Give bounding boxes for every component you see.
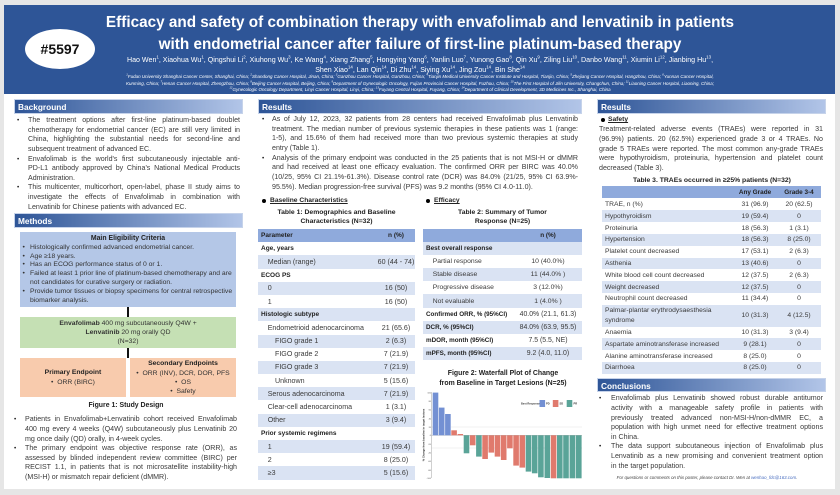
results paragraphs: As of July 12, 2023, 32 patients from 28 centers had received Envafolimab plus Lenvatinib — [272, 115, 578, 123]
table 3: adverse events: Hypothyroidism — [605, 212, 652, 220]
y axis ticks: -80 — [428, 470, 432, 472]
figure 2 title: Figure 2: Waterfall Plot of Change — [448, 370, 558, 377]
heading: Methods — [14, 213, 243, 228]
table 3: adverse events: 0 — [797, 260, 801, 267]
table 3: adverse events: 31 (96.9) — [741, 200, 769, 208]
table 3: adverse events: White blood cell count decreased — [605, 272, 704, 279]
table 1: demographics: 19 (59.4) — [382, 443, 410, 451]
eligibility list — [30, 244, 232, 304]
eligibility bullets: • — [22, 253, 25, 260]
table 1: demographics: Prior systemic regimens — [261, 430, 337, 437]
table 3: adverse events: Any Grade — [739, 188, 771, 196]
treatment box: Lenvatinib 20 mg orally QD — [86, 329, 170, 336]
table 1: demographics: 7 (21.9) — [384, 363, 408, 371]
bullet marks: • — [599, 443, 601, 450]
table 3: adverse events: 8 (25.0) — [787, 236, 811, 243]
background paragraphs: Envafolimab is the world's first subcutaneously injectable anti- — [28, 154, 240, 162]
table 3: adverse events: syndrome — [605, 317, 635, 324]
conclusions paragraphs: previously treated advanced non-MSI-H/non-dMMR EC, a — [611, 414, 823, 422]
table 2 title — [458, 209, 547, 225]
heading: Results (right column) — [597, 99, 826, 114]
conclusions paragraphs — [611, 394, 823, 470]
table 3: adverse events: 12 (37.5) — [741, 272, 769, 279]
bullet marks — [262, 116, 264, 162]
table 2: tumor response: n (%) — [540, 232, 556, 239]
table 3: adverse events: TRAE, n (%) — [605, 200, 643, 208]
bullet marks: • — [17, 184, 19, 191]
table 1: demographics: Median (range) — [268, 258, 316, 266]
results paragraphs: Analysis of the primary endpoint was conducted in the 25 patients that is not MSI-H or dMMR — [272, 154, 578, 162]
subheading: baseline characteristics: Baseline Characteristics — [270, 197, 348, 204]
table 3: adverse events: 10 (31.3) — [741, 329, 769, 336]
methods paragraphs: assessed by blinded independent review committee (BIRC) per — [25, 454, 237, 462]
table 2 title: Response (N=25) — [475, 218, 530, 225]
authors — [127, 55, 713, 74]
results paragraphs — [272, 115, 578, 191]
eligibility list: Failed at least 1 prior line of platinum-based chemotherapy and are — [30, 270, 232, 277]
table 2: tumor response: 1 (4.0% ) — [534, 298, 562, 305]
table 3: adverse events: Palmar-plantar erythrodysaesthesia — [605, 307, 712, 314]
table 3: adverse events: 8 (25.0) — [743, 364, 767, 371]
table 2: tumor response: Partial response — [433, 258, 482, 265]
table 1: demographics: 7 (21.9) — [384, 350, 408, 358]
background paragraphs: The treatment options after first-line platinum-based doublet — [28, 116, 240, 124]
y axis ticks: 20 — [429, 427, 432, 429]
legend: PR — [574, 402, 577, 406]
table 1: demographics: 0 — [268, 284, 272, 292]
heading: Results (middle column): Results — [262, 102, 292, 112]
results paragraphs: treatment. The median number of previous systemic therapies in these patients was 1 (range: — [272, 125, 578, 133]
bullet marks — [17, 117, 19, 191]
study design flow diagram — [20, 232, 236, 397]
eligibility list: Has an ECOG performance status of 0 or 1. — [30, 261, 162, 268]
results paragraphs: and had received at least one efficacy evaluation. The confirmed ORR per BIRC was 40.0% — [272, 163, 578, 171]
eligibility bullets: • — [22, 261, 25, 268]
eligibility list: not candidates for curative surgery or radiation. — [30, 279, 172, 286]
background paragraphs: China, highlighting the substantial needs for second-line and — [28, 135, 240, 143]
background paragraphs: Lenvatinib for Chinese patients with advanced EC. — [28, 203, 187, 211]
table 1: demographics: 1 — [268, 443, 272, 451]
treatment box — [20, 317, 236, 348]
table 3 title: Table 3. TRAEs occurred in ≥25% patients (N=32) — [633, 176, 791, 184]
caption: Figure 1: Figure 1: Study Design — [88, 402, 164, 409]
conclusions paragraphs: in the target population. — [611, 462, 685, 470]
table 1: demographics: 1 — [268, 298, 272, 306]
bullet marks — [14, 416, 16, 452]
table 2: tumor response: 7.5 (5.5, NE) — [528, 337, 568, 344]
table 3: adverse events: 11 (34.4) — [742, 295, 768, 302]
legend: SD — [560, 402, 563, 406]
bullet: efficacy — [426, 199, 430, 203]
table 2: tumor response: 9.2 (4.0, 11.0) — [527, 350, 569, 357]
results paragraphs: entry (Table 1). — [272, 144, 319, 152]
heading: Background: Background — [18, 102, 66, 112]
table 3: adverse events: 19 (59.4) — [741, 212, 769, 220]
table 3: adverse events: Diarrhoea — [605, 364, 635, 371]
text: safety paragraph — [599, 125, 823, 172]
background paragraphs: PD-L1 antibody approved by China's National Medical Products — [28, 164, 240, 172]
treatment box: (N=32) — [118, 338, 138, 345]
table 1: demographics: Endometrioid adenocarcinoma — [268, 324, 364, 332]
text: methods bullets — [14, 415, 237, 481]
SD bars — [451, 430, 556, 478]
table 3: adverse events: 2 (6.3) — [789, 248, 809, 255]
affiliations: Kunming, China; 7Henan Cancer Hospital, Zhengzhou, China; 8Beijing Cancer Hospital, Beijing, China; 9Department of Gynecologic Oncology, Fujian Provincial Cancer Hospital, Fuzhou, China; 10The First Hospital of Jilin University, Changchun, China; 11Liaoning Cancer Hospital, Liaoning, China; — [126, 79, 714, 86]
table 2: tumor response: 3 (12.0%) — [533, 284, 563, 291]
table 1 title: Table 1: Demographics and Baseline — [277, 209, 396, 216]
methods paragraphs — [25, 415, 237, 481]
figure 2 title: from Baseline in Target Lesions (N=25) — [439, 380, 567, 387]
table 1: demographics: FIGO grade 1 — [275, 337, 318, 345]
table 2: tumor response: Best overall response — [426, 245, 492, 252]
background paragraphs: chemotherapy for endometrial cancer (EC) are still very limited in — [28, 126, 240, 134]
secondary endpoints box: • Safety — [170, 388, 196, 395]
table 1: demographics: Unknown — [275, 377, 305, 385]
subheading: safety: Safety — [608, 116, 628, 123]
secondary endpoints box: • OS — [175, 379, 191, 386]
table 1: demographics: 60 (44 - 74) — [378, 258, 414, 266]
methods paragraphs: (MSI-H) or mismatch repair deficient (dMMR). — [25, 473, 168, 481]
eligibility bullets: • — [22, 244, 25, 251]
y axis ticks: -20 — [428, 444, 432, 446]
heading: Methods: Methods — [18, 216, 52, 226]
bullet: baseline characteristics — [262, 199, 266, 203]
table 3: adverse events: Aspartate aminotransferase increased — [605, 341, 719, 348]
background paragraphs: investigate the effects of Envafolimab in combination with — [28, 193, 240, 201]
bullet: safety — [600, 118, 605, 122]
primary endpoint box — [20, 358, 126, 397]
table 3: adverse events: 18 (56.3) — [741, 236, 769, 243]
methods paragraphs: Patients in Envafolimab+Lenvatinib cohort received Envafolimab — [25, 415, 237, 423]
y axis ticks: 0 — [430, 435, 432, 437]
table 1: demographics: 3 (9.4) — [386, 416, 406, 424]
title — [106, 14, 734, 52]
table 3: adverse events: 10 (31.3) — [741, 312, 769, 319]
text: safety paragraph: decreased (Table 3). — [599, 164, 664, 172]
y axis ticks: 60 — [429, 410, 432, 412]
text: background bullets — [17, 116, 240, 211]
table 3: adverse events: 2 (6.3) — [789, 272, 809, 279]
treatment box: Envafolimab 400 mg subcutaneously Q4W + — [59, 320, 197, 327]
heading: Background — [14, 99, 243, 114]
table 3: adverse events: Hypertension — [605, 236, 645, 243]
background paragraphs: Administration. — [28, 174, 75, 182]
table 3: adverse events: 8 (25.0) — [743, 353, 767, 360]
title: Efficacy and safety of combination therapy with envafolimab and lenvatinib in patients — [106, 14, 734, 31]
connector arrow 1 — [127, 307, 128, 317]
table 1: demographics: Serous adenocarcinoma — [268, 390, 345, 398]
authors: Hao Wen1, Xiaohua Wu1, Qingshui Li2, Xiuhong Wu3, Ke Wang4, Xiang Zhang5, Hongying Yang6, Yanlin Luo7, Yunong Gao8, Qin Xu9, Ziling Liu10, Danbo Wang11, Xiumin Li12, Jianbing Hu13, — [127, 55, 713, 64]
table 3: adverse events: 0 — [797, 341, 801, 348]
text: results bullets — [262, 115, 578, 191]
waterfall chart — [422, 392, 582, 480]
table 2: tumor response: 11 (44.0% ) — [531, 271, 565, 278]
table 1: demographics: 5 (15.6) — [384, 469, 408, 477]
table 2: tumor response: Stable disease — [433, 271, 477, 278]
text: safety paragraph: grade 5 TRAEs were reported. The most common any-grade TRAEs — [599, 145, 823, 153]
table 1: demographics: Clear-cell adenocarcinoma — [268, 403, 352, 411]
table 3: adverse events: 13 (40.6) — [741, 260, 769, 267]
primary endpoint box: • ORR (BIRC) — [51, 379, 95, 386]
contact note: For questions or comments on this poster, please contact Dr. Wen at wenhao_fdc@163.com. — [617, 475, 797, 480]
y axis ticks: -60 — [428, 461, 432, 463]
subheading: efficacy: Efficacy — [434, 197, 460, 204]
heading: Results (right column): Results — [601, 102, 631, 112]
table 3: adverse events: 18 (56.3) — [741, 224, 769, 232]
table 3: adverse events: Proteinuria — [605, 224, 638, 232]
table 3: adverse events: Platelet count decreased — [605, 248, 679, 255]
background paragraphs — [28, 116, 240, 211]
table 1: demographics: 7 (21.9) — [384, 390, 408, 398]
table 1: demographics: 1 (3.1) — [386, 403, 406, 411]
bullet marks: • — [262, 116, 264, 123]
results paragraphs: 1-5), and 15.6% of them had received more than two previous systemic therapies at study — [272, 134, 578, 142]
primary endpoint box: Primary Endpoint — [45, 369, 101, 376]
eligibility heading: Main Eligibility Criteria — [91, 235, 165, 242]
table 2: tumor response: 10 (40.0%) — [531, 258, 565, 265]
table 3: adverse events: 0 — [797, 295, 801, 302]
conclusions paragraphs: population with high unmet need for effective treatment options — [611, 423, 823, 431]
secondary endpoints box: • ORR (INV), DCR, DOR, PFS — [136, 370, 230, 377]
text: safety paragraph: Treatment-related adverse events (TRAEs) were reported in 31 — [599, 125, 823, 133]
table 1 title — [277, 209, 396, 225]
table 3: adverse events: Neutrophil count decreased — [605, 295, 688, 302]
y axis ticks: 100 — [427, 392, 432, 394]
y axis ticks: 40 — [429, 418, 432, 420]
legend: Best Response — [521, 402, 540, 406]
table 3: adverse events: 1 (3.1) — [789, 224, 809, 232]
text: safety paragraph: were hypothyroidism, proteinuria, hypertension and platelet count — [599, 154, 823, 162]
table 1: demographics: Parameter — [261, 232, 293, 239]
methods paragraphs: 400 mg every 4 weeks (Q4W) subcutaneously plus Lenvatinib 20 — [25, 425, 237, 433]
table 2: tumor response: mDOR, month (95%CI) — [426, 337, 493, 344]
eligibility bullets — [22, 244, 25, 295]
table 3: adverse events: 0 — [797, 353, 801, 360]
affiliations — [126, 72, 714, 92]
authors: Shen Xiao14, Lan Qin14, Di Zhu14, Siying Xu14, Jing Zou14, Bin She14 — [315, 65, 525, 74]
table 1: demographics: FIGO grade 2 — [275, 350, 318, 358]
results paragraphs: 95.5%). Median progression-free survival (PFS) was 9.2 months (95% CI 4.0-11.0). — [272, 183, 533, 191]
table 1: demographics: Other — [268, 416, 285, 424]
figure 2 title — [439, 370, 567, 387]
eligibility list: Provide tumor tissues or biopsy specimens for central retrospective — [30, 288, 232, 295]
table 1: demographics: 16 (50) — [385, 284, 407, 292]
table 1: demographics: FIGO grade 3 — [275, 363, 318, 371]
title: with endometrial cancer after failure of first-line platinum-based therapy — [159, 36, 681, 52]
table 3: adverse events: 0 — [797, 364, 801, 371]
bullet marks: • — [17, 117, 19, 124]
table 2: tumor response: 40.0% (21.1, 61.3) — [520, 311, 576, 318]
bullet marks: • — [262, 155, 264, 162]
table 2: tumor response: 84.0% (63.9, 95.5) — [520, 324, 576, 331]
text: conclusions bullets — [599, 394, 823, 470]
table 3: adverse events: 4 (12.5) — [787, 312, 811, 319]
header banner — [4, 5, 835, 94]
PR bars — [464, 435, 582, 478]
table 3: adverse events: Alanine aminotransferase increased — [605, 353, 713, 360]
table 2: tumor response: Not evaluable — [433, 298, 474, 305]
results paragraphs: (10/25, 95% CI 21.1%-61.3%). Disease control rate (DCR) was 84.0% (21/25, 95% CI 63.9%- — [272, 173, 578, 181]
table 3: adverse events: Grade 3-4 — [784, 188, 814, 196]
eligibility bullets: • — [22, 288, 25, 295]
conclusions paragraphs: The data support subcutaneous injection of Envafolimab plus — [611, 442, 823, 450]
table 2: tumor response: mPFS, month (95%CI) — [426, 350, 491, 357]
heading: Results (middle column) — [258, 99, 582, 114]
table 3: adverse events: Weight decreased — [605, 284, 659, 291]
table 3: adverse events: 0 — [797, 212, 801, 220]
PD bars — [433, 393, 451, 435]
table 2: tumor response: DCR, % (95%CI) — [426, 324, 474, 331]
y axis ticks: -100 — [427, 478, 432, 480]
eligibility list: Age ≥18 years. — [30, 253, 76, 260]
affiliations: 1Fudan University Shanghai Cancer Center, Shanghai, China; 2Shandong Cancer Hospital, Jinan, China; 3Ganzhou Cancer Hospital, Ganzhou, China; 4Tianjin Medical University Cancer Institute and Hospital, Tianjin, China; 5Zhejiang Cancer Hospital, Hangzhou, China; 6Yunnan Cancer Hospital, — [126, 72, 714, 79]
secondary endpoints box: Secondary Endpoints — [148, 360, 218, 367]
table 3: adverse events: 12 (37.5) — [741, 284, 769, 291]
legend — [521, 400, 577, 407]
table 2 title: Table 2: Summary of Tumor — [458, 209, 547, 216]
eligibility criteria box — [20, 232, 236, 307]
conclusions paragraphs: in China. — [611, 433, 639, 441]
table 3: adverse events: Anaemia — [605, 329, 632, 336]
text: safety paragraph: (96.9%) patients. 20 (62.5%) experienced grade 3 or 4 TRAEs. No — [599, 135, 823, 143]
table 2: tumor response: Progressive disease — [433, 284, 494, 291]
legend: PD — [546, 402, 550, 406]
background paragraphs: This multicenter, multicorhort, open-label, phase II study aims to — [28, 183, 240, 191]
table 1: demographics: ECOG PS — [261, 272, 291, 279]
conclusions paragraphs: Lenvatinib as a new promising and convenient treatment option — [611, 452, 823, 460]
table 3: adverse events: Asthenia — [605, 260, 631, 267]
table 3: adverse events: 20 (62.5) — [785, 200, 813, 208]
table 1: demographics: 2 — [268, 456, 272, 464]
methods paragraphs: The primary endpoint was objective response rate (ORR), as — [25, 444, 237, 452]
bullet marks: • — [599, 395, 601, 402]
y axis label: % Change from baseline in target lesions — [422, 408, 426, 461]
table 3: adverse events: 3 (9.4) — [789, 329, 809, 336]
y axis ticks: -40 — [428, 452, 432, 454]
table 1: demographics: Histologic subtype — [261, 311, 319, 318]
table 3: adverse events: 17 (53.1) — [741, 248, 769, 255]
background paragraphs: subsequent treatment of advanced EC. — [28, 145, 151, 153]
table 3: adverse events — [602, 186, 821, 374]
table 1: demographics: 2 (6.3) — [386, 337, 406, 345]
methods paragraphs: RECIST 1.1, in patients that is not microsatellite instability-high — [25, 463, 237, 471]
eligibility list: Histologically confirmed advanced endometrial cancer. — [30, 244, 194, 251]
heading: Conclusions — [597, 378, 826, 392]
connector arrow 2 — [127, 348, 128, 358]
table 1: demographics — [258, 229, 415, 480]
table 1 title: Characteristics (N=32) — [301, 218, 372, 225]
eligibility bullets: • — [22, 270, 25, 277]
conclusions paragraphs: activity with a manageable safety profile in patients with — [611, 404, 823, 412]
heading: Conclusions: Conclusions — [601, 381, 651, 391]
table 1: demographics: 16 (50) — [385, 298, 407, 306]
bullet marks: • — [14, 416, 16, 423]
bullet marks: • — [14, 445, 16, 452]
table 1: demographics: Age, years — [261, 245, 294, 252]
secondary endpoints box — [130, 358, 236, 397]
table 1: demographics: 8 (25.0) — [384, 456, 408, 464]
table 1: demographics: 21 (65.6) — [382, 324, 410, 332]
table 2: tumor response: Confirmed ORR, % (95%CI) — [426, 311, 507, 318]
table 1: demographics: 5 (15.6) — [384, 377, 408, 385]
bullet marks — [599, 395, 601, 450]
table 2: tumor response — [423, 229, 582, 360]
abstract number badge — [25, 29, 95, 69]
y axis ticks: 80 — [429, 401, 432, 403]
table 3: adverse events: 0 — [797, 284, 801, 291]
table 1: demographics: n (%) — [388, 232, 404, 239]
abstract number badge: #5597 — [41, 41, 79, 57]
table 3: adverse events: 9 (28.1) — [743, 341, 767, 348]
conclusions paragraphs: Envafolimab plus Lenvatinib showed robust durable antitumor — [611, 394, 823, 402]
bullet marks: • — [17, 156, 19, 162]
y axis ticks — [427, 392, 432, 480]
table 1: demographics: ≥3 — [268, 469, 276, 477]
affiliations: 12Gynecologic Oncology Department, Linyi Cancer Hospital, Linyi, China; 13Fuyang Central Hospital, Fuyang, China; 14Department of Clinical Development, 3D Medicines Inc., Shanghai, China — [229, 86, 611, 92]
eligibility list: biomarker analysis. — [30, 297, 89, 304]
methods paragraphs: mg once daily (QD) orally, in 4-week cycles. — [25, 435, 162, 443]
